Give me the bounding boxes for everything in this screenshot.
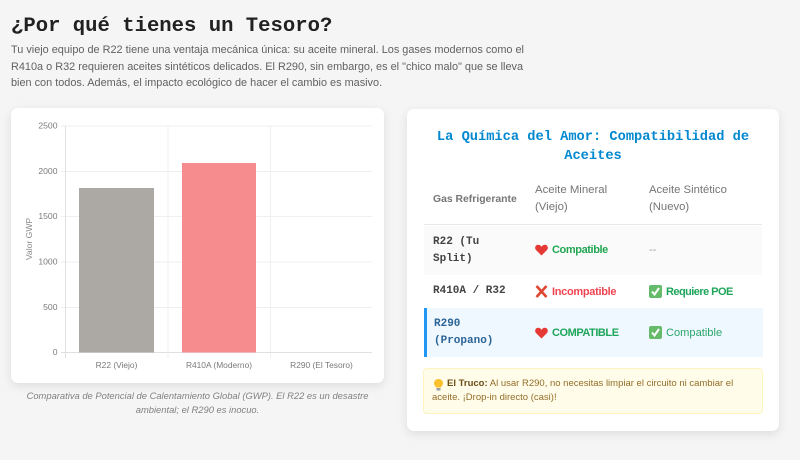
row: R290 highlighted: R290 — [434, 318, 460, 330]
intro paragraph: Tu viejo equipo de R22 tiene una ventaja mecánica única: su aceite mineral. Los gases modernos como el — [11, 44, 524, 56]
row: R410A / R32: R410A / R32 — [433, 285, 506, 297]
icon: heart — [535, 244, 548, 256]
table header: Aceite Sintético — [649, 184, 727, 196]
row: R22: Compatible — [552, 244, 608, 256]
callout: tip: El Truco: Al usar R290, no necesitas limpiar el circuito ni cambiar el — [447, 378, 733, 389]
y axis tick labels: 2500 — [38, 120, 58, 130]
table header — [424, 181, 762, 225]
bar: R410A — [182, 163, 256, 352]
bar: R22 — [79, 188, 154, 352]
row: R22 — [424, 226, 762, 275]
table header: (Viejo) — [535, 201, 568, 213]
icon: heart — [535, 328, 548, 338]
row: R410A / R32: Incompatible — [552, 286, 616, 298]
icon: light bulb — [434, 379, 443, 390]
icon: check — [649, 326, 662, 339]
intro paragraph: R410a o R32 requieren aceites sintéticos delicados. El R290, sin embargo, es el "chico malo" que se lleva — [11, 61, 523, 73]
x axis category labels: R410A (Moderno) — [186, 360, 252, 370]
x axis category labels — [96, 360, 353, 370]
chart caption: Comparativa de Potencial de Calentamiento Global (GWP). El R22 es un desastre — [27, 390, 368, 401]
intro paragraph: bien con todos. Además, el impacto ecológico de hacer el cambio es masivo. — [11, 77, 382, 89]
intro paragraph — [11, 44, 524, 89]
panel heading: Aceites — [564, 149, 622, 164]
panel heading: La Química del Amor: Compatibilidad de — [437, 130, 749, 145]
y axis tick labels: 2000 — [38, 166, 58, 176]
callout: tip: aceite. ¡Drop-in directo (casi)! — [432, 392, 557, 403]
row: R290 highlighted: Compatible — [666, 327, 722, 339]
row accent bar — [424, 308, 427, 357]
row: R290 highlighted: (Propano) — [434, 335, 493, 347]
title: ¿Por qué tienes un Tesoro? — [11, 15, 332, 38]
row: R290 highlighted: COMPATIBLE — [552, 327, 619, 339]
row: R22: R22 (Tu — [433, 236, 479, 248]
row: R22: Split) — [433, 253, 473, 265]
icon: cross — [536, 285, 548, 298]
bar chart — [24, 120, 372, 370]
y axis tick labels: 1500 — [38, 211, 58, 221]
row: R410A / R32 — [433, 285, 733, 298]
row: R290 highlighted — [424, 308, 763, 357]
icon: check — [649, 285, 662, 298]
y axis tick labels: 0 — [53, 347, 58, 357]
table header: Aceite Mineral — [535, 184, 607, 196]
y axis tick labels: 1000 — [38, 256, 58, 266]
panel heading — [437, 130, 749, 164]
y axis tick labels — [38, 120, 58, 357]
panel: GWP bar chart — [11, 108, 384, 383]
x axis category labels: R22 (Viejo) — [96, 360, 138, 370]
y axis tick labels: 500 — [43, 302, 58, 312]
row: R410A / R32: Requiere POE — [666, 286, 733, 298]
table header: (Nuevo) — [649, 201, 689, 213]
chart caption — [27, 390, 368, 415]
callout: tip — [423, 368, 763, 414]
row: R22: -- — [649, 244, 656, 256]
panel: oil compatibility — [407, 109, 779, 431]
table header: Gas Refrigerante — [433, 194, 517, 205]
x axis category labels: R290 (El Tesoro) — [290, 360, 353, 370]
chart caption: ambiental; el R290 es inocuo. — [136, 404, 259, 415]
y axis title: Valor GWP — [24, 218, 34, 260]
